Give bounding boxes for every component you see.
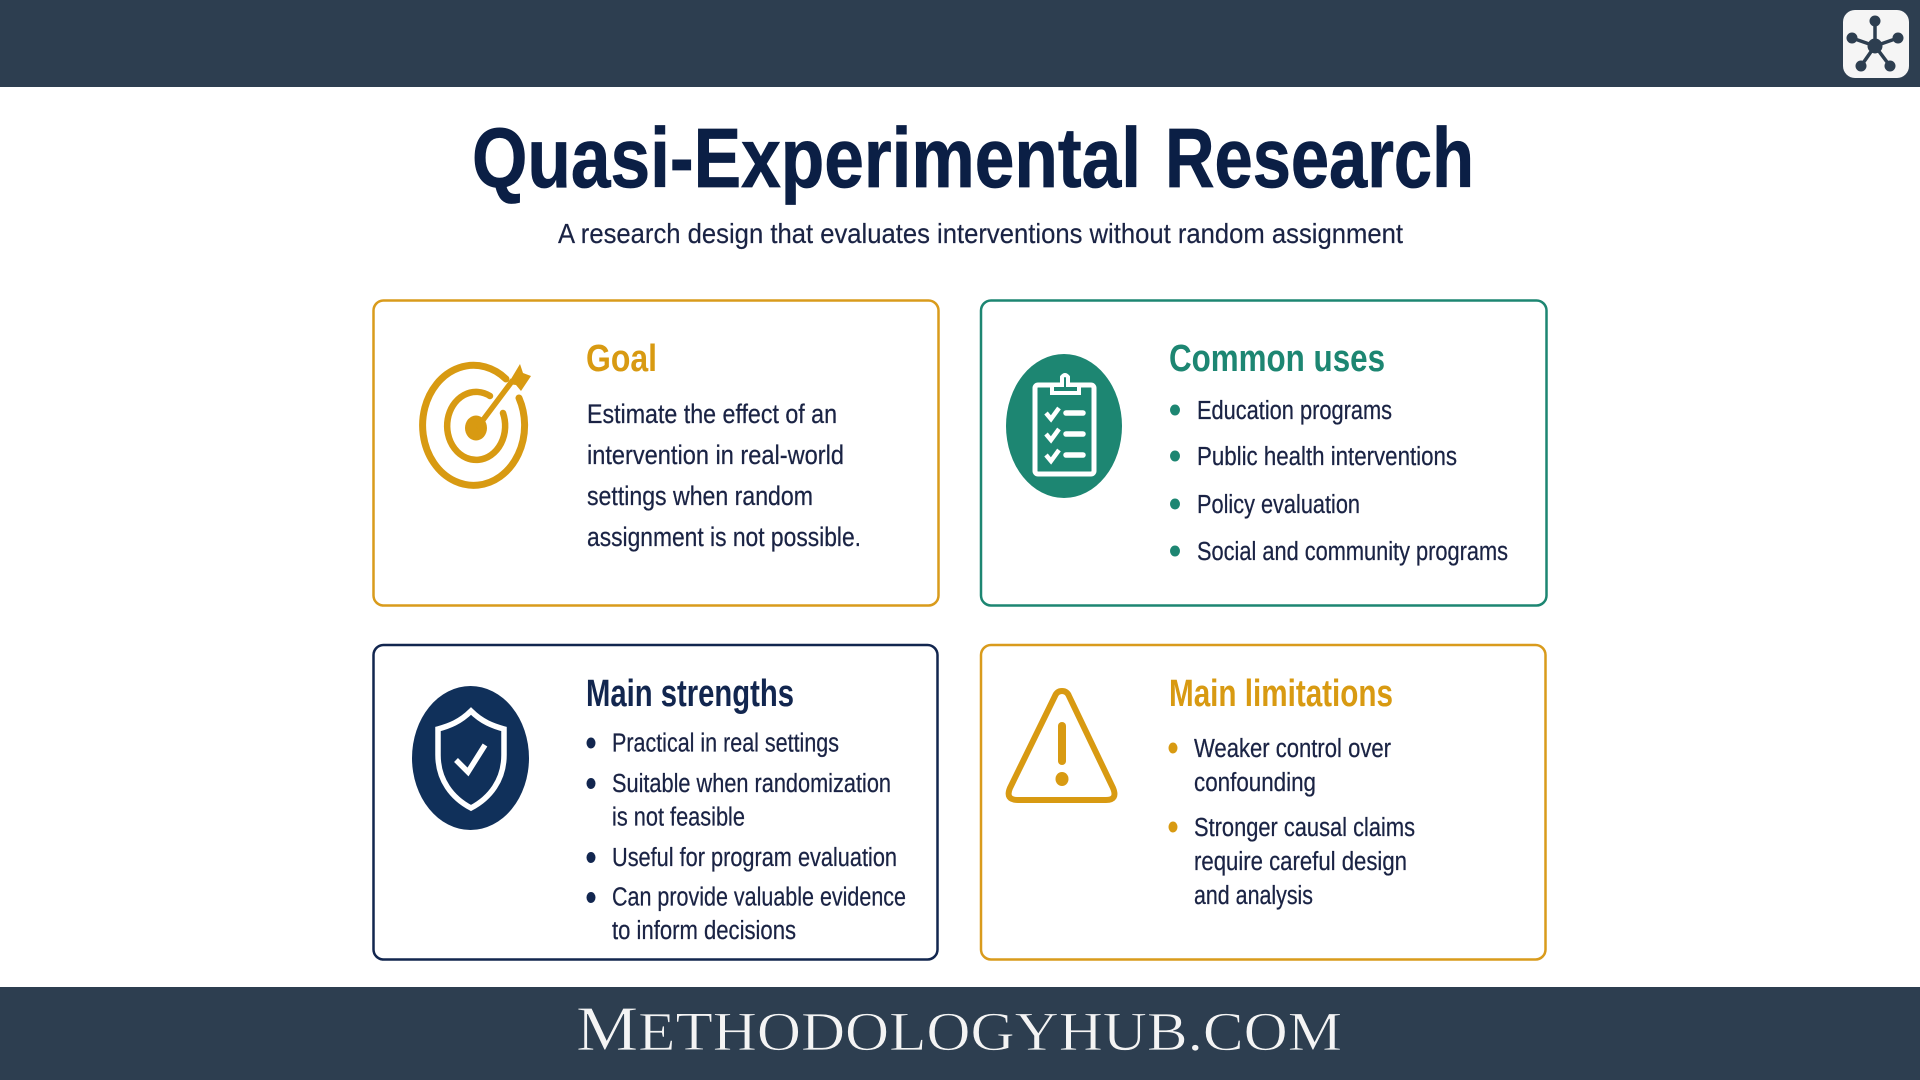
subtitle: A research design that evaluates interventions without random assignment — [558, 218, 1403, 249]
list: main strengths — [586, 730, 906, 945]
list: main limitations: confounding — [1194, 769, 1316, 797]
list: common uses — [1170, 397, 1508, 566]
title: Research — [1165, 111, 1474, 205]
list: main limitations: and analysis — [1194, 882, 1313, 910]
text block: goal description — [587, 399, 861, 552]
panel: common uses — [981, 300, 1546, 606]
text block: goal description: assignment is not possible. — [587, 522, 861, 552]
list: main limitations — [1168, 735, 1415, 910]
list: main strengths: Can provide valuable evidence — [612, 884, 906, 912]
top header bar — [0, 0, 1920, 87]
list: main limitations: Weaker control over — [1194, 735, 1391, 763]
icon: target with arrow — [423, 364, 531, 485]
heading: common uses: Common uses — [1169, 338, 1385, 380]
icon: shield with check — [412, 686, 529, 830]
list: common uses: Education programs — [1197, 397, 1392, 425]
heading: main limitations: Main limitations — [1169, 673, 1393, 715]
icon: warning triangle — [1009, 691, 1114, 800]
list: common uses: Social and community programs — [1197, 538, 1508, 566]
list: main strengths: Practical in real settings — [612, 730, 839, 758]
list: main limitations: Stronger causal claims — [1194, 814, 1415, 842]
panel: goal — [374, 300, 938, 606]
list: main strengths: Suitable when randomization — [612, 770, 891, 798]
text block: goal description: Estimate the effect of an — [587, 399, 837, 429]
icon: clipboard checklist — [1006, 354, 1122, 498]
list: main strengths: Useful for program evaluation — [612, 844, 897, 872]
list: common uses: Public health interventions — [1197, 443, 1457, 471]
footer website name: METHODOLOGYHUB.COM — [576, 994, 1342, 1064]
heading: goal: Goal — [586, 338, 657, 380]
list: main strengths: is not feasible — [612, 804, 745, 832]
title: Quasi-Experimental — [472, 111, 1141, 205]
icon: network logo — [1843, 10, 1909, 78]
footer bar — [0, 987, 1920, 1080]
panel: main limitations — [981, 645, 1546, 960]
heading: main strengths: Main strengths — [586, 673, 794, 715]
text block: goal description: intervention in real-world — [587, 440, 844, 470]
panel: main strengths — [374, 645, 938, 960]
list: main limitations: require careful design — [1194, 848, 1407, 876]
list: main strengths: to inform decisions — [612, 917, 796, 945]
list: common uses: Policy evaluation — [1197, 491, 1360, 519]
text block: goal description: settings when random — [587, 481, 813, 511]
